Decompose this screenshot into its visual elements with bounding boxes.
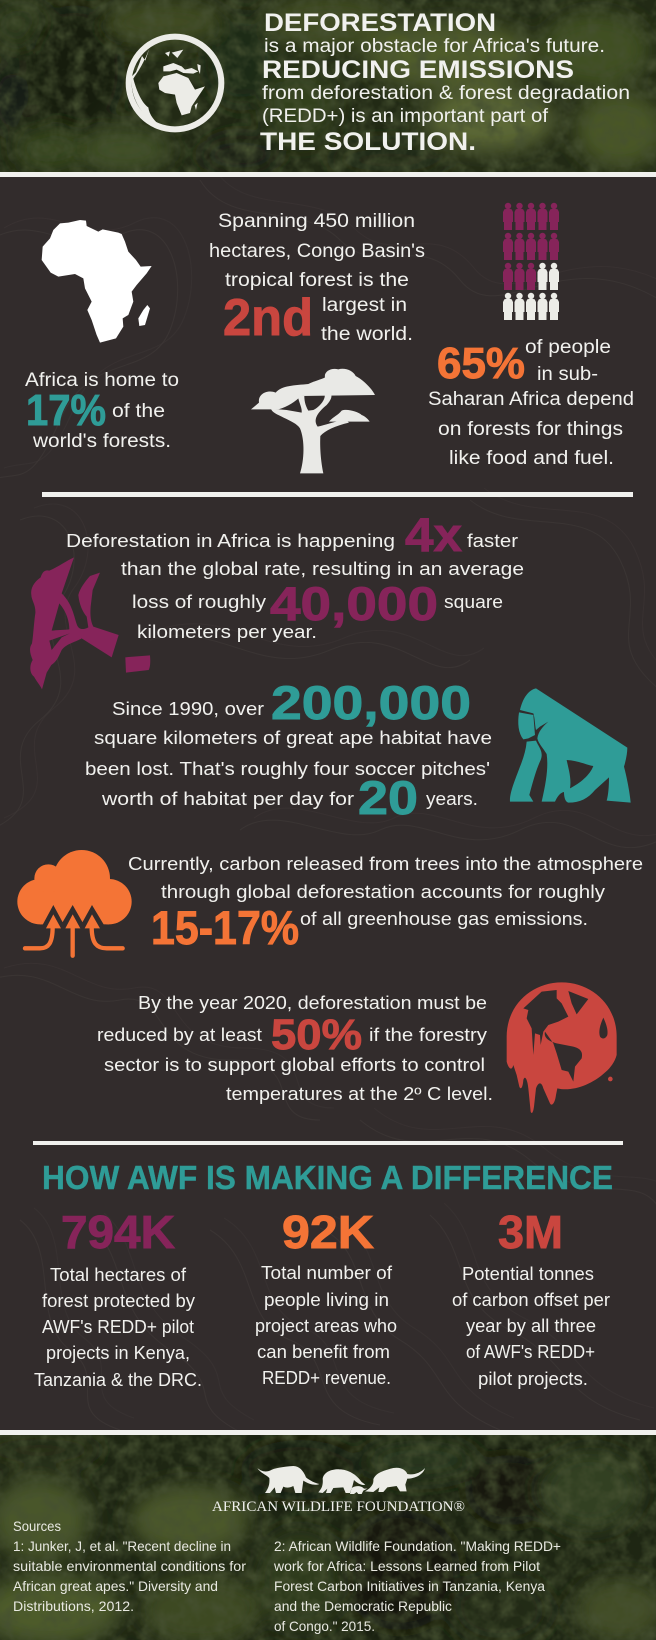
text: 200,000 habitat lost: been lost. That's roughly four soccer pitches' (85, 759, 490, 779)
icon: felled tree (30, 557, 150, 689)
sources right: work for Africa: Lessons Learned from Pilot (273, 1558, 540, 1574)
icon: gorilla (510, 688, 631, 803)
sources left: African great apes." Diversity and (13, 1578, 218, 1594)
text: Africa forests 17%: world's forests. (32, 431, 171, 452)
header text: (REDD+) is an important part of (262, 106, 549, 127)
stat column: 92K: 92K (282, 1206, 374, 1258)
text: 65% depend on forests: of people (525, 337, 611, 358)
text: Congo Basin 2nd (209, 211, 425, 347)
text: 15-17% carbon: of all greenhouse gas emissions. (300, 909, 588, 929)
stat column: 92K (255, 1206, 397, 1388)
text: 200,000 habitat lost: 200,000 (271, 676, 471, 729)
icon: people pictogram 65% (503, 203, 559, 320)
text: 50% reduction: 50% (271, 1011, 362, 1059)
white band under banner (0, 172, 656, 177)
text: 65% depend on forests: like food and fuel. (449, 448, 614, 469)
sources right: and the Democratic Republic (274, 1598, 452, 1614)
logo: African Wildlife Foundation (212, 1466, 465, 1515)
sources left: Sources (13, 1518, 61, 1534)
stat column: 92K: REDD+ revenue. (262, 1368, 391, 1388)
text: 50% reduction: if the forestry (369, 1025, 487, 1045)
heading: deforestation: DEFORESTATION (264, 9, 496, 37)
header text: from deforestation & forest degradation (262, 83, 630, 104)
text: Congo Basin 2nd: tropical forest is the (225, 270, 409, 291)
icon: acacia tree (251, 369, 375, 473)
text: 50% reduction (97, 993, 493, 1104)
stat column: 3M: of AWF's REDD+ (466, 1342, 595, 1362)
text: 200,000 habitat lost (85, 676, 492, 824)
header text: is a major obstacle for Africa's future. (264, 36, 605, 57)
text: 200,000 habitat lost: worth of habitat per day for (101, 789, 354, 809)
icon: Africa map (42, 220, 152, 343)
white band above footer (0, 1430, 656, 1435)
text: 4x faster, 40,000: 40,000 (270, 577, 438, 630)
text: 4x faster, 40,000: square (444, 592, 503, 612)
text: 15-17% carbon: Currently, carbon released from trees into the atmosphere (128, 854, 643, 874)
icon: globe (129, 37, 221, 130)
bottom forest photo banner (0, 1432, 656, 1640)
sources left: suitable environmental conditions for (13, 1558, 246, 1574)
sources right: of Congo." 2015. (274, 1618, 375, 1634)
stat column: 92K: can benefit from (257, 1342, 390, 1362)
heading: reducing emissions: REDUCING EMISSIONS (262, 56, 574, 84)
text: Congo Basin 2nd: hectares, Congo Basin's (209, 241, 425, 262)
text: 65% depend on forests: 65% (437, 339, 525, 388)
text: 15-17% carbon (128, 854, 643, 954)
heading: how AWF is making a difference: HOW AWF IS MAKING A DIFFERENCE (42, 1159, 613, 1196)
stat column: 794K: AWF's REDD+ pilot (42, 1317, 194, 1337)
text: 4x faster, 40,000 (66, 508, 524, 642)
wordmark: AFRICAN WILDLIFE FOUNDATION® (212, 1499, 465, 1515)
stat column: 92K: people living in (264, 1290, 389, 1310)
icon: cloud with rising arrows (17, 850, 132, 956)
text: Africa forests 17% (25, 370, 179, 452)
sources right: 2: African Wildlife Foundation. "Making REDD+ (274, 1538, 561, 1554)
stat column: 3M: 3M (498, 1206, 563, 1258)
stat column: 3M: year by all three (466, 1316, 596, 1336)
text: 4x faster, 40,000: kilometers per year. (137, 622, 317, 642)
text: 50% reduction: reduced by at least (97, 1025, 262, 1045)
text: Africa forests 17%: 17% (26, 386, 106, 435)
text: Africa forests 17%: Africa is home to (25, 370, 179, 391)
text: Africa forests 17%: of the (112, 401, 165, 422)
text: 4x faster, 40,000: Deforestation in Africa is happening (66, 531, 395, 551)
text: 65% depend on forests (428, 337, 634, 469)
text: 50% reduction: temperatures at the 2º C level. (226, 1084, 493, 1104)
divider (42, 492, 633, 497)
stat column: 794K (34, 1206, 202, 1390)
text: 65% depend on forests: Saharan Africa depend (428, 389, 634, 410)
stat column: 3M: Potential tonnes (462, 1264, 594, 1284)
sources left (13, 1518, 246, 1614)
text: 4x faster, 40,000: 4x (405, 508, 462, 561)
text: 15-17% carbon: 15-17% (151, 901, 299, 954)
text: Congo Basin 2nd: Spanning 450 million (218, 211, 415, 232)
sources left: 1: Junker, J, et al. "Recent decline in (13, 1538, 231, 1554)
sources right: Forest Carbon Initiatives in Tanzania, Kenya (274, 1578, 545, 1594)
text: 65% depend on forests: in sub- (537, 364, 598, 385)
text: Congo Basin 2nd: the world. (321, 324, 413, 345)
text: 200,000 habitat lost: years. (426, 789, 478, 809)
icon: melting globe (507, 982, 617, 1113)
text: 4x faster, 40,000: loss of roughly (132, 592, 266, 612)
dark background panel (0, 172, 656, 1435)
stat column: 92K: Total number of (261, 1263, 393, 1283)
stat column: 794K: projects in Kenya, (46, 1343, 190, 1363)
header text (260, 9, 630, 156)
divider (33, 1141, 623, 1145)
text: 50% reduction: sector is to support global efforts to control (104, 1055, 485, 1075)
text: 200,000 habitat lost: 20 (358, 771, 418, 824)
text: 65% depend on forests: on forests for things (438, 419, 623, 440)
text: 200,000 habitat lost: Since 1990, over (112, 699, 264, 719)
text: Congo Basin 2nd: largest in (322, 295, 407, 316)
stat column: 794K: forest protected by (42, 1291, 195, 1311)
text: Congo Basin 2nd: 2nd (223, 289, 313, 347)
stat column: 794K: 794K (61, 1206, 175, 1258)
text: 50% reduction: By the year 2020, deforestation must be (138, 993, 487, 1013)
stat column: 92K: project areas who (255, 1316, 397, 1336)
icon: elephants (257, 1466, 425, 1494)
sources right (273, 1538, 561, 1634)
text: 15-17% carbon: through global deforestation accounts for roughly (161, 882, 605, 902)
text: 4x faster, 40,000: than the global rate, resulting in an average (121, 559, 524, 579)
text: 4x faster, 40,000: faster (467, 531, 518, 551)
sources left: Distributions, 2012. (13, 1598, 134, 1614)
top forest photo banner (0, 0, 656, 178)
heading: the solution: THE SOLUTION. (260, 128, 476, 156)
stat column: 3M (452, 1206, 610, 1389)
stat column: 794K: Tanzania & the DRC. (34, 1370, 202, 1390)
stat column: 794K: Total hectares of (50, 1265, 187, 1285)
stat column: 3M: pilot projects. (478, 1369, 588, 1389)
stat column: 3M: of carbon offset per (452, 1290, 610, 1310)
text: 200,000 habitat lost: square kilometers of great ape habitat have (94, 728, 492, 748)
